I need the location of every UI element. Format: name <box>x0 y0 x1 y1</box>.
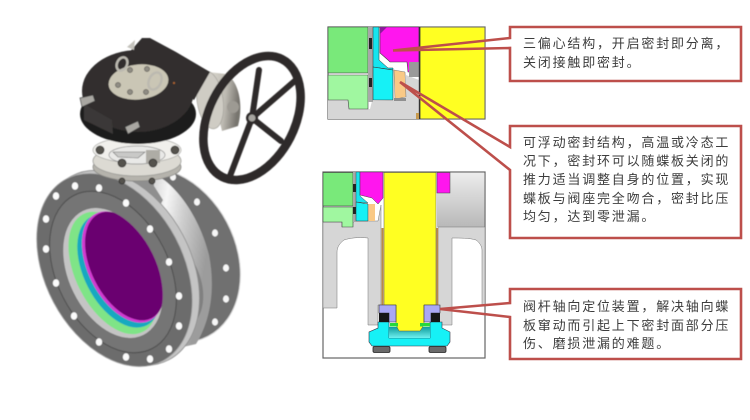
handwheel <box>184 40 320 196</box>
magenta disc <box>360 172 383 204</box>
body shadow detail <box>186 256 203 322</box>
back flange <box>60 141 270 369</box>
callout text: 三偏心结构，开启密封即分离， <box>523 36 730 51</box>
callout: triple offset <box>393 27 741 81</box>
callout text: 可浮动密封结构，高温或冷态工 <box>523 135 730 150</box>
light green lower part <box>328 75 368 109</box>
yellow stem <box>420 28 484 118</box>
bonnet flange <box>93 137 181 184</box>
cyan retainer lower <box>373 67 393 100</box>
gasket strip <box>353 172 356 222</box>
bushing lines <box>382 228 438 306</box>
cyan upper retainer <box>356 172 368 203</box>
callout outline <box>440 289 741 359</box>
left body wall <box>323 205 381 325</box>
callout text: 板窜动而引起上下密封面部分压 <box>523 318 730 333</box>
cap recess <box>389 327 430 338</box>
magenta disc right <box>437 172 450 193</box>
callout text: 蝶板与阀座完全吻合，密封比压 <box>523 191 730 206</box>
lifting eye bolts <box>115 56 164 92</box>
cyan end cap <box>369 322 450 346</box>
callout text: 伤、磨损泄漏的难题。 <box>523 336 671 351</box>
bore and disc <box>62 208 164 338</box>
purple positioning rings <box>379 305 440 322</box>
right body wall <box>438 227 485 325</box>
front flange side <box>8 143 232 393</box>
callout: stem positioning <box>440 289 741 359</box>
flange bolt holes <box>43 182 182 363</box>
orange seal ring <box>394 70 406 99</box>
yellow stem <box>384 172 436 331</box>
callout outline <box>393 27 741 81</box>
actuator bolts <box>80 40 140 134</box>
worm gear actuator <box>80 38 210 144</box>
black seals <box>379 313 440 322</box>
callout text: 推力适当调整自身的位置，实现 <box>523 172 730 187</box>
gasket strip <box>368 27 373 102</box>
section detail: lower stem <box>323 172 485 358</box>
callout text: 阀杆轴向定位装置，解决轴向蝶 <box>523 299 730 314</box>
cyan lower retainer <box>356 202 368 221</box>
cap bolts <box>373 346 446 352</box>
grey valve body <box>328 75 419 119</box>
gear shaft housing <box>193 69 240 131</box>
valve neck <box>120 176 163 209</box>
callout outline <box>400 82 741 238</box>
green upper part <box>328 27 368 73</box>
cyan retainer upper <box>373 27 393 70</box>
green upper part <box>323 172 353 206</box>
right grey housing <box>437 173 484 227</box>
grey packing <box>409 62 419 77</box>
top cover plate <box>107 61 170 103</box>
light green lower part <box>323 207 353 227</box>
section detail: upper seal <box>328 27 485 119</box>
callout text: 均匀，达到零泄漏。 <box>523 209 656 224</box>
dark corner <box>380 27 387 34</box>
green o-rings <box>390 323 430 326</box>
callout text: 关闭接触即密封。 <box>523 55 641 70</box>
valve body <box>110 172 212 350</box>
callout text: 况下，密封环可以随蝶板关闭的 <box>523 154 730 168</box>
cover bolts <box>115 66 150 95</box>
front flange <box>5 147 224 393</box>
magenta disc <box>380 27 419 72</box>
valve illustration <box>36 37 306 368</box>
orange seal <box>368 204 375 221</box>
callout: floating seal <box>400 82 741 238</box>
